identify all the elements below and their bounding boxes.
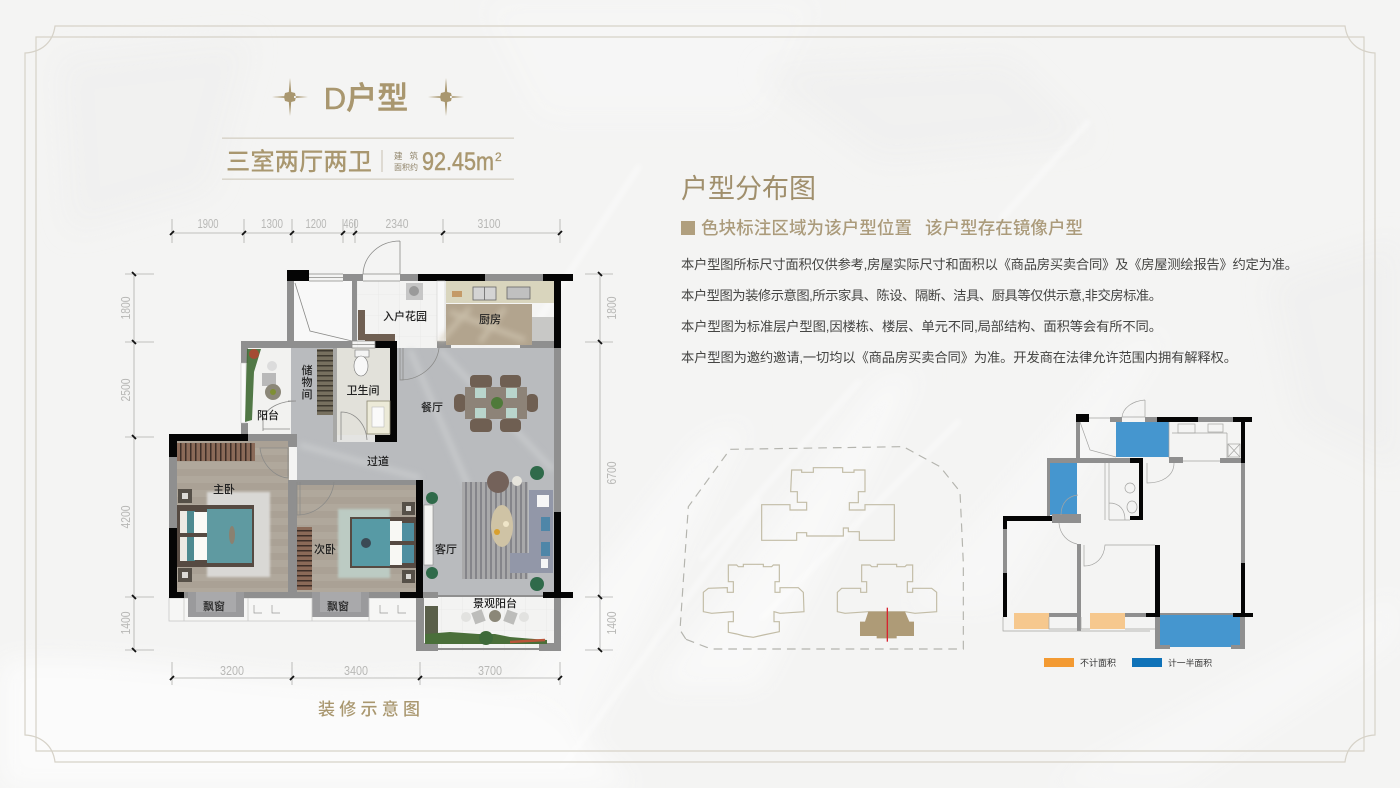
site boundary: [680, 447, 963, 649]
dimensions: right: 1800: [605, 296, 619, 320]
dimensions: left: 2500: [119, 378, 133, 402]
windows and door swings: [260, 241, 439, 515]
text block: disclaimers: [681, 256, 1298, 365]
dimensions: bottom: [170, 662, 562, 685]
storage cabinet: [317, 349, 333, 415]
balcony plants and chairs: [245, 349, 281, 422]
room labels: 景观阳台: [473, 596, 517, 610]
scenic balcony furniture: [425, 606, 547, 645]
text block: disclaimers: 本户型图为标准层户型图,因楼栋、楼层、单元不同,局部结构、面积等会有所不同。: [681, 318, 1162, 334]
room labels: [203, 309, 517, 613]
room labels: 阳台: [257, 408, 279, 422]
icon: left star: [272, 78, 308, 116]
room labels: 主卧: [213, 482, 235, 496]
dimensions: right: 1400: [605, 611, 619, 634]
text block: disclaimers: 本户型图为邀约邀请,一切均以《商品房买卖合同》为准。开发商在法律允许范围内拥有解释权。: [681, 349, 1237, 365]
subtitle: layout and area: 92.45m: [422, 148, 494, 176]
dimensions: right: 6700: [605, 461, 619, 484]
floors: [169, 281, 561, 651]
room labels: 餐厅: [421, 400, 443, 414]
walls: [169, 274, 561, 651]
dimensions: bottom: 3400: [344, 664, 368, 678]
room labels: 客厅: [435, 542, 457, 556]
living room furniture: [424, 466, 553, 591]
bay windows: [184, 592, 406, 621]
site plan: [680, 447, 963, 649]
dimensions: top: 1200: [306, 217, 327, 231]
legend: 计一半面积: [1168, 657, 1212, 668]
caption: decoration diagram: 装修示意图: [318, 700, 420, 719]
dining table: [454, 375, 538, 432]
note: colour block explanation: 该户型存在镜像户型: [925, 218, 1083, 238]
dimensions: top: 1300: [261, 217, 283, 231]
room labels: 间: [302, 388, 312, 401]
subtitle: layout and area: 面积约: [394, 162, 418, 172]
dimensions: top: 1900: [198, 217, 219, 231]
dimensions: right: [585, 272, 619, 652]
text block: disclaimers: 本户型图所标尺寸面积仅供参考,房屋实际尺寸和面积以《商品房买卖合同》及《房屋测绘报告》约定为准。: [681, 256, 1298, 272]
room labels: 储: [302, 363, 312, 377]
entry garden: [358, 281, 445, 341]
area fills: [1014, 422, 1240, 647]
note: colour block explanation: [681, 218, 1083, 238]
plan line details: [1003, 400, 1240, 631]
subtitle: layout and area: 建 筑: [394, 151, 418, 161]
building bottom right with highlighted unit: [837, 564, 937, 642]
dimensions: bottom: 3700: [478, 664, 502, 678]
room labels: 次卧: [314, 542, 336, 556]
decorated floor plan: [169, 241, 573, 651]
area plan: [1003, 400, 1253, 649]
plants: [426, 466, 544, 591]
heading: unit distribution: 户型分布图: [681, 174, 816, 204]
dimensions: top: 2340: [386, 217, 409, 231]
dimensions: top: 3100: [478, 217, 501, 231]
room labels: 过道: [367, 454, 389, 468]
note: colour block explanation: 色块标注区域为该户型位置: [701, 218, 912, 238]
icon: right star: [428, 78, 464, 116]
dimensions: bottom: 3200: [220, 664, 244, 678]
dimensions: left: 1800: [119, 296, 133, 320]
text block: disclaimers: 本户型图为装修示意图,所示家具、陈设、隔断、洁具、厨具等仅供示意,非交房标准。: [681, 287, 1162, 303]
dimensions: left: 4200: [119, 505, 133, 528]
second bedroom: [297, 502, 416, 590]
dimensions: top: 460: [344, 217, 359, 231]
room labels: 物: [302, 375, 312, 389]
legend: [1044, 657, 1212, 668]
subtitle: layout and area: 三室两厅两卫: [226, 149, 372, 176]
kitchen: [440, 281, 554, 345]
dimensions: left: 1400: [119, 611, 133, 634]
subtitle: layout and area: [222, 138, 514, 180]
room labels: 飘窗: [327, 599, 349, 613]
building top: [762, 468, 894, 540]
balcony window: [241, 363, 246, 423]
title: D户型: [272, 78, 464, 116]
plan walls: [1003, 417, 1245, 649]
room labels: 入户花园: [383, 309, 427, 323]
room labels: 飘窗: [203, 599, 225, 613]
dimensions: left: [119, 272, 154, 652]
bathroom fixtures: [354, 350, 390, 434]
title: D户型: D户型: [324, 81, 408, 116]
subtitle: layout and area: 2: [495, 150, 502, 164]
legend: 不计面积: [1080, 657, 1116, 668]
room labels: 卫生间: [346, 383, 380, 397]
master bedroom: [177, 443, 270, 582]
room labels: 厨房: [479, 312, 501, 326]
building bottom left: [703, 564, 804, 637]
dimensions: top: [170, 217, 562, 243]
